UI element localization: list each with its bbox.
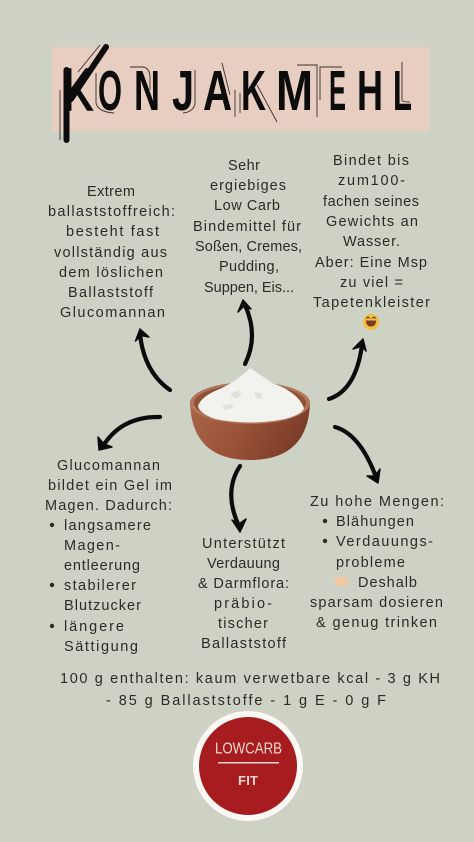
text block: Wasserbindung: Bindet bis: [333, 153, 409, 169]
text block: ballaststoffreich: Glucomannan: [60, 305, 165, 321]
text block: zu hohe Mengen: sparsam dosieren: [310, 595, 443, 611]
text block: ballaststoffreich: dem löslichen: [59, 265, 163, 281]
logo badge: FIT: [238, 773, 258, 788]
text block: Glucomannan Gel: langsamere: [64, 518, 151, 534]
title text: [60, 45, 412, 140]
text block: Glucomannan Gel: Sättigung: [64, 639, 138, 655]
text block: zu hohe Mengen: Zu hohe Mengen:: [310, 494, 444, 510]
text block: Wasserbindung: zu viel =: [340, 275, 403, 291]
arrow: to Glucomannan: [98, 417, 160, 450]
text block: zu hohe Mengen: Verdauungs-: [336, 534, 433, 550]
text block: zu hohe Mengen: probleme: [336, 555, 405, 571]
text block: Verdauung und Darmflora: tischer: [218, 616, 268, 632]
text block: ballaststoffreich: Ballaststoff: [68, 285, 154, 301]
title text: H: [357, 59, 383, 123]
text block: Bindemittel: ergiebiges: [210, 178, 286, 194]
text block: Glucomannan Gel: Blutzucker: [64, 598, 141, 614]
text block: Wasserbindung: fachen seines: [323, 194, 419, 210]
icon: pointing hand: [335, 577, 349, 586]
text block: ballaststoffreich: besteht fast: [66, 224, 159, 240]
nutrition facts line: - 85 g Ballaststoffe - 1 g E - 0 g F: [106, 693, 386, 709]
text block: Bindemittel: Soßen, Cremes,: [195, 239, 302, 255]
text block: Verdauung und Darmflora: Verdauung: [207, 556, 280, 572]
title text: J: [172, 59, 194, 123]
text block: ballaststoffreich: ballaststoffreich:: [48, 204, 175, 220]
text block: zu hohe Mengen: [310, 494, 444, 631]
text block: Bindemittel: Bindemittel für: [193, 219, 301, 235]
arrow: to Wasserbindung: [329, 339, 366, 399]
title text: K: [241, 59, 266, 123]
text block: Verdauung und Darmflora: Unterstützt: [202, 536, 285, 552]
title text: K: [63, 57, 93, 123]
text block: Verdauung und Darmflora: & Darmflora:: [198, 576, 289, 592]
title text: M: [276, 59, 313, 123]
text block: Bindemittel: Sehr: [228, 158, 260, 174]
text block: Bindemittel: [193, 158, 302, 296]
text block: Glucomannan Gel: entleerung: [64, 558, 140, 574]
bowl with konjac flour: [190, 368, 310, 460]
title decoration: [60, 45, 410, 140]
text block: ballaststoffreich: [48, 184, 175, 321]
text block: Wasserbindung: Aber: Eine Msp: [315, 255, 427, 271]
arrow: to ballaststoffreich: [136, 329, 170, 390]
title text: E: [329, 59, 346, 123]
nutrition facts line: 100 g enthalten: kaum verwetbare kcal - 3 g KH: [60, 671, 440, 687]
text block: Bindemittel: Pudding,: [219, 259, 279, 275]
arrow: to Verdauungsprobleme: [335, 427, 380, 483]
text block: Verdauung und Darmflora: Ballaststoff: [201, 636, 287, 652]
logo badge: [193, 711, 303, 821]
nutrition facts line: [60, 671, 440, 709]
text block: Wasserbindung: Tapetenkleister: [313, 295, 430, 311]
text block: Wasserbindung: zum100-: [338, 173, 405, 189]
text block: Bindemittel: Suppen, Eis...: [204, 280, 294, 296]
title text: A: [203, 59, 232, 123]
title text: O: [98, 59, 122, 123]
text block: ballaststoffreich: vollständig aus: [54, 245, 167, 261]
text block: Glucomannan Gel: bildet ein Gel im: [48, 478, 172, 494]
arrow: to Verdauung: [231, 466, 246, 532]
text block: Wasserbindung: Gewichts an: [326, 214, 418, 230]
text block: Glucomannan Gel: Magen. Dadurch:: [45, 498, 172, 514]
text block: Glucomannan Gel: [45, 458, 172, 655]
text block: Bindemittel: Low Carb: [214, 198, 280, 214]
text block: Wasserbindung: [313, 153, 430, 330]
text block: ballaststoffreich: Extrem: [87, 184, 135, 200]
text block: Glucomannan Gel: Magen-: [64, 538, 120, 554]
text block: Verdauung und Darmflora: präbio-: [214, 596, 272, 612]
logo badge: LOWCARB: [215, 740, 282, 758]
text block: zu hohe Mengen: & genug trinken: [316, 615, 437, 631]
icon: laughing emoji: [363, 314, 379, 330]
arrow: to Bindemittel: [238, 300, 252, 364]
text block: Glucomannan Gel: stabilerer: [64, 578, 136, 594]
text block: Verdauung und Darmflora: [198, 536, 289, 652]
text block: Glucomannan Gel: Glucomannan: [57, 458, 160, 474]
title banner: [52, 45, 429, 140]
title text: L: [393, 59, 412, 123]
title text: N: [134, 59, 160, 123]
text block: Glucomannan Gel: längere: [64, 619, 124, 635]
text block: zu hohe Mengen: Blähungen: [336, 514, 414, 530]
text block: Wasserbindung: Wasser.: [343, 234, 400, 250]
text block: zu hohe Mengen: Deshalb: [358, 575, 417, 591]
